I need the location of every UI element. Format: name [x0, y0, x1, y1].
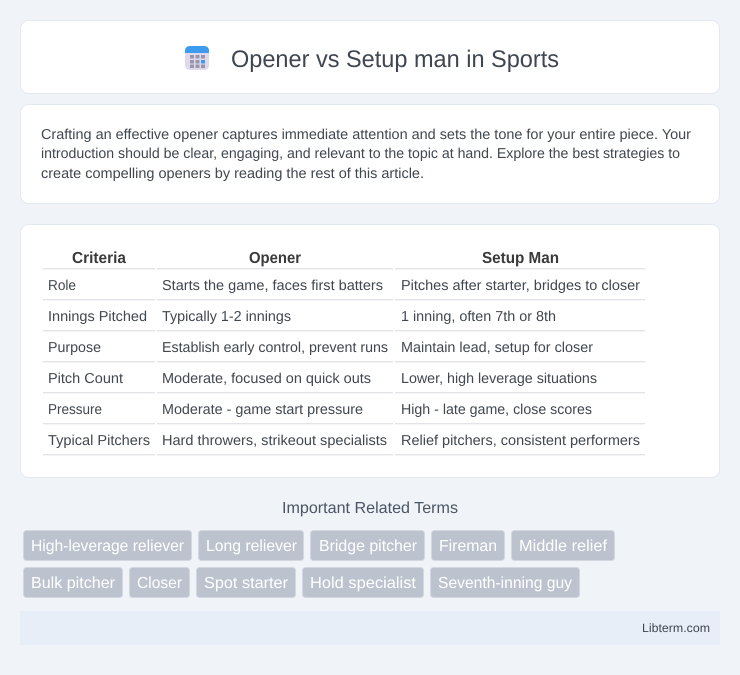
panel: introduction	[20, 104, 720, 204]
table row: pressure: Moderate - game start pressure	[162, 402, 363, 418]
tag list: related terms: Bulk pitcher	[31, 575, 116, 592]
table row: pitch count: Pitch Count	[48, 371, 123, 387]
icon: calendar	[185, 46, 209, 70]
table row: pressure: Pressure	[48, 402, 102, 418]
footer: Libterm.com	[642, 621, 710, 635]
tag list: related terms: Middle relief	[519, 538, 608, 555]
tag list: related terms: Long reliever	[206, 538, 298, 555]
text block: introduction: create compelling openers by reading the rest of this article.	[41, 166, 424, 182]
table row: role: Role	[48, 278, 76, 294]
table row: pressure	[43, 402, 645, 424]
table row: typical pitchers	[43, 433, 645, 455]
table row: purpose: Establish early control, prevent runs	[162, 340, 388, 356]
title: Opener vs Setup man in Sports	[231, 46, 559, 73]
table row: role: Pitches after starter, bridges to closer	[401, 278, 640, 294]
table row: pitch count: Lower, high leverage situations	[401, 371, 597, 387]
table row: purpose: Purpose	[48, 340, 101, 356]
panel: comparison table	[20, 224, 720, 478]
tag list: related terms: Spot starter	[204, 575, 289, 592]
table row: typical pitchers: Typical Pitchers	[48, 433, 150, 449]
table row: pitch count	[43, 371, 645, 393]
table header row: Setup Man	[482, 250, 559, 267]
table row: innings pitched: Innings Pitched	[48, 309, 147, 325]
table row: purpose: Maintain lead, setup for closer	[401, 340, 593, 356]
tag list: related terms: High-leverage reliever	[31, 538, 185, 555]
table header row: Criteria	[72, 250, 126, 267]
text block: introduction: introduction should be clear, engaging, and relevant to the topic at hand. Explore the best strategies to	[41, 146, 680, 162]
footer	[20, 611, 720, 645]
table row: innings pitched: 1 inning, often 7th or 8th	[401, 309, 556, 325]
tag list: related terms: Seventh-inning guy	[438, 575, 572, 592]
table row: role	[43, 278, 645, 300]
text block: introduction	[41, 127, 691, 182]
table row: typical pitchers: Relief pitchers, consistent performers	[401, 433, 640, 449]
tag list: related terms	[24, 530, 614, 598]
table row: innings pitched: Typically 1-2 innings	[162, 309, 291, 325]
tag list: related terms: Closer	[137, 575, 183, 592]
table row: role: Starts the game, faces first batters	[162, 278, 383, 294]
table row: typical pitchers: Hard throwers, strikeout specialists	[162, 433, 387, 449]
table row: pitch count: Moderate, focused on quick outs	[162, 371, 371, 387]
table header row	[43, 250, 645, 269]
tag list: related terms: Hold specialist	[310, 575, 417, 592]
heading: important related terms: Important Related Terms	[282, 500, 458, 517]
tag list: related terms: Bridge pitcher	[319, 538, 418, 555]
table row: pressure: High - late game, close scores	[401, 402, 592, 418]
table row: innings pitched	[43, 309, 645, 331]
table row: purpose	[43, 340, 645, 362]
tag list: related terms: Fireman	[439, 538, 497, 555]
text block: introduction: Crafting an effective opener captures immediate attention and sets the tone for your entire piece. Your	[41, 127, 691, 143]
panel: page header	[20, 20, 720, 94]
table header row: Opener	[249, 250, 301, 267]
